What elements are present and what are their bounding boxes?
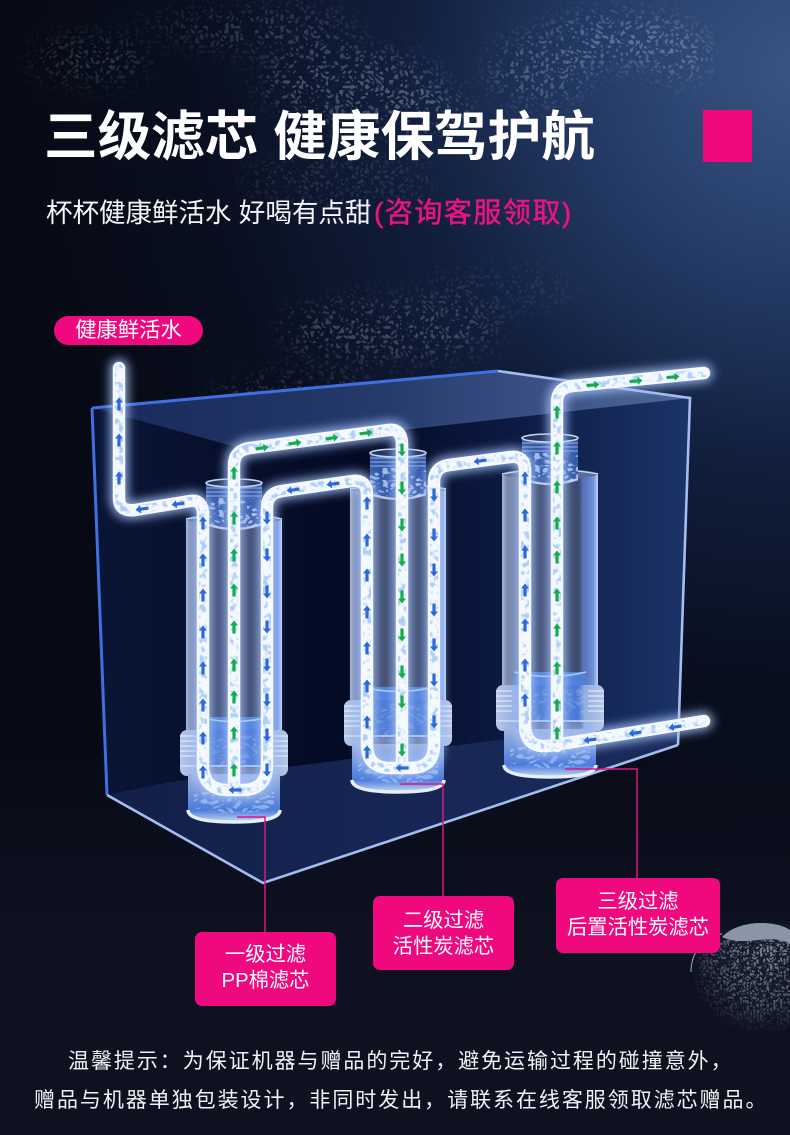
flow arrows: blue	[115, 398, 682, 794]
leader lines	[237, 769, 637, 932]
pink square	[703, 110, 752, 162]
footer note: 赠品与机器单独包装设计，非同时发出，请联系在线客服领取滤芯赠品。	[34, 1084, 768, 1114]
water splash texture at top	[26, 0, 718, 394]
tank left edges	[92, 371, 498, 795]
callout: stage 3 filter: 后置活性炭滤芯	[567, 917, 709, 939]
callout: stage 3 filter: 三级过滤	[597, 891, 679, 913]
icon: water bubble lower right	[690, 923, 790, 1030]
tank lid	[92, 371, 690, 448]
subtitle: (咨询客服领取)	[374, 197, 573, 228]
callout: stage 3 filter	[556, 878, 720, 953]
title: 三级滤芯 健康保驾护航	[44, 107, 595, 167]
tank right and bottom edges	[107, 371, 690, 883]
footer note	[34, 1045, 768, 1114]
glass tank	[92, 371, 690, 883]
filter cartridge 3	[496, 434, 604, 777]
callout: stage 2 filter: 二级过滤	[403, 910, 484, 932]
filter cartridge 1	[180, 479, 288, 822]
callout: stage 1 filter	[195, 932, 336, 1006]
water pipes	[119, 368, 704, 790]
callout: stage 1 filter: PP棉滤芯	[222, 970, 309, 992]
label: fresh water pill: 健康鲜活水	[75, 318, 182, 342]
filter cartridge 2	[344, 449, 452, 792]
flow arrows: green	[230, 372, 680, 776]
subtitle	[46, 197, 573, 228]
callout: stage 2 filter: 活性炭滤芯	[393, 936, 494, 958]
footer note: 温馨提示：为保证机器与赠品的完好，避免运输过程的碰撞意外，	[68, 1045, 734, 1075]
tank floor	[107, 722, 678, 883]
callout: stage 1 filter: 一级过滤	[225, 944, 306, 966]
subtitle: 杯杯健康鲜活水 好喝有点甜	[46, 198, 371, 228]
label: fresh water pill	[54, 316, 203, 345]
callout: stage 2 filter	[373, 896, 514, 970]
